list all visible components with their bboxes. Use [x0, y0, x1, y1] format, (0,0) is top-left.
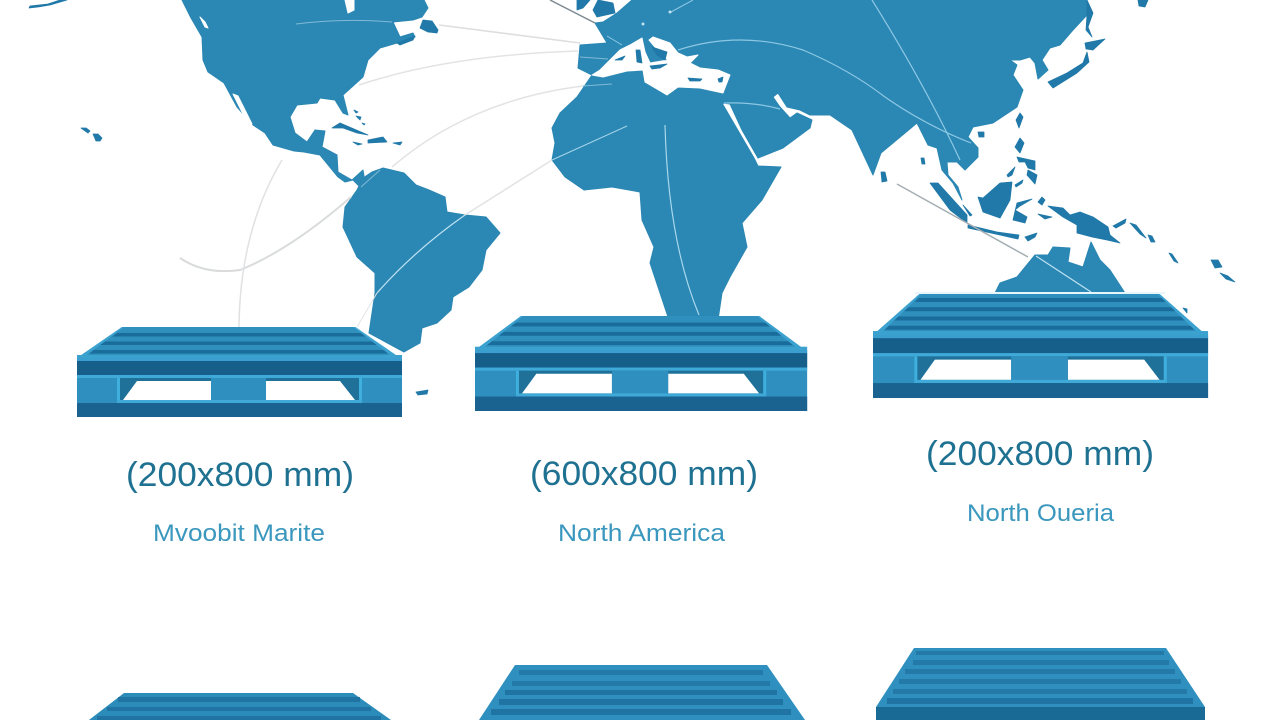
pallet 4, cropped at bottom — [89, 693, 391, 720]
land: New Guinea — [1048, 206, 1120, 243]
pallet 1 — [77, 327, 402, 417]
dimension label 1: (200x800 mm) — [126, 456, 354, 494]
route: Arabia — [724, 103, 780, 109]
land: Hawaii and Aleutians — [29, 0, 102, 141]
land: Philippines — [1007, 138, 1037, 187]
land: Pacific islands — [416, 219, 1235, 395]
region label 2: North America — [558, 520, 726, 547]
land: South America — [343, 168, 500, 352]
land: Eurasia and Africa — [552, 0, 1087, 320]
route: Pacific arc — [180, 197, 351, 271]
dimension label 2: (600x800 mm) — [530, 455, 758, 493]
route: North America to Europe — [439, 25, 580, 43]
route: Caribbean to Africa — [392, 86, 583, 167]
route: Asia vertical — [872, 0, 960, 160]
pallet 3 — [873, 292, 1208, 398]
land: Britain and Ireland — [577, 0, 615, 17]
pallet 2 — [475, 316, 807, 411]
land: Nova Scotia and Newfoundland — [397, 20, 438, 45]
route: Eurasia arc — [678, 40, 971, 143]
shipping route lines — [180, 0, 1091, 355]
land: Japan, Sakhalin, Taiwan, Hainan, Sri Lanka — [881, 0, 1148, 182]
land: Australia — [995, 242, 1125, 293]
pallet 5, cropped at bottom — [479, 665, 805, 720]
sea: Great Lakes and Pacific slits — [200, 0, 354, 124]
land: Caribbean islands — [332, 110, 402, 145]
route: Europe top — [550, 0, 595, 23]
land: North and Central America — [182, 0, 428, 187]
land: Indonesia — [930, 182, 1052, 241]
route: Pacific vertical — [239, 160, 282, 327]
land: Mediterranean islands — [615, 47, 723, 82]
route: US east coast to Iberia — [359, 51, 578, 85]
route: Africa vertical — [665, 125, 699, 315]
route: South America to Africa — [465, 160, 552, 215]
dimension label 3: (200x800 mm) — [926, 435, 1154, 473]
sea: Mediterranean — [592, 37, 730, 95]
region label 1: Mvoobit Marite — [153, 520, 325, 547]
pallet 6, cropped at bottom — [876, 648, 1205, 720]
route: Indian Ocean to Australia — [897, 184, 1028, 257]
route markers — [642, 10, 672, 26]
route: Eastern Europe stub — [671, 0, 693, 12]
world map — [29, 0, 1235, 395]
region label 3: North Oueria — [967, 500, 1115, 527]
